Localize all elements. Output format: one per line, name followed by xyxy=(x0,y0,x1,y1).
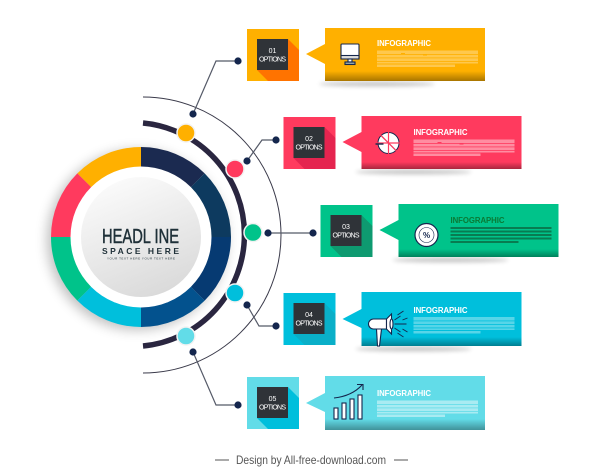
option tile: OPTIONS xyxy=(296,144,323,152)
footer credit: Design by All-free-download.com xyxy=(236,453,386,467)
icon: percent dial xyxy=(415,224,438,246)
info panel xyxy=(306,28,485,81)
option tile: OPTIONS xyxy=(259,56,286,64)
option tile: 04 xyxy=(305,312,313,319)
info panel: INFOGRAPHIC xyxy=(414,128,468,137)
card 1 xyxy=(247,28,485,86)
icon: percent dial: % xyxy=(423,231,430,240)
connector 2 xyxy=(243,136,280,165)
option tile xyxy=(284,117,336,169)
info panel: INFOGRAPHIC xyxy=(414,306,468,315)
ring segments xyxy=(51,147,231,327)
option tile: OPTIONS xyxy=(259,404,286,412)
headline: HEADL INE xyxy=(102,225,179,248)
connector 5 xyxy=(189,348,242,409)
card 5 xyxy=(247,376,485,430)
option tile: 03 xyxy=(342,224,350,231)
headline xyxy=(102,225,179,260)
card 2 xyxy=(284,116,522,174)
ring shadow xyxy=(47,150,227,330)
option tile xyxy=(247,377,299,429)
info panel xyxy=(306,376,485,430)
headline: YOUR TEXT HERE YOUR TEXT HERE xyxy=(107,256,175,260)
connector 4 xyxy=(243,301,280,330)
option tile: 02 xyxy=(305,136,313,143)
radial diagram xyxy=(47,57,317,409)
thick dark arc xyxy=(143,123,244,346)
option tile: 05 xyxy=(269,396,276,403)
option tile: OPTIONS xyxy=(296,320,323,328)
info panel xyxy=(380,204,558,257)
icon: megaphone xyxy=(368,311,408,346)
option tile: OPTIONS xyxy=(332,232,360,240)
headline: SPACE HERE xyxy=(102,246,179,256)
option tile xyxy=(284,293,336,345)
info panel: INFOGRAPHIC xyxy=(450,216,505,225)
centre disc xyxy=(70,166,212,308)
info panel xyxy=(342,116,522,169)
connector 3 xyxy=(264,229,317,237)
arc dots xyxy=(177,124,262,345)
card 4 xyxy=(284,292,522,352)
info panel xyxy=(342,292,522,346)
icon: bar chart xyxy=(334,384,363,419)
icon: pie chart xyxy=(376,131,402,155)
option tile xyxy=(247,29,299,81)
option tile: 01 xyxy=(269,48,276,55)
outer thin arc xyxy=(143,97,281,373)
option tile xyxy=(320,205,372,257)
icon: monitor xyxy=(341,44,359,64)
card 3 xyxy=(320,204,558,262)
connector 1 xyxy=(189,57,242,118)
info panel: INFOGRAPHIC xyxy=(377,39,431,48)
info panel: INFOGRAPHIC xyxy=(377,389,431,398)
